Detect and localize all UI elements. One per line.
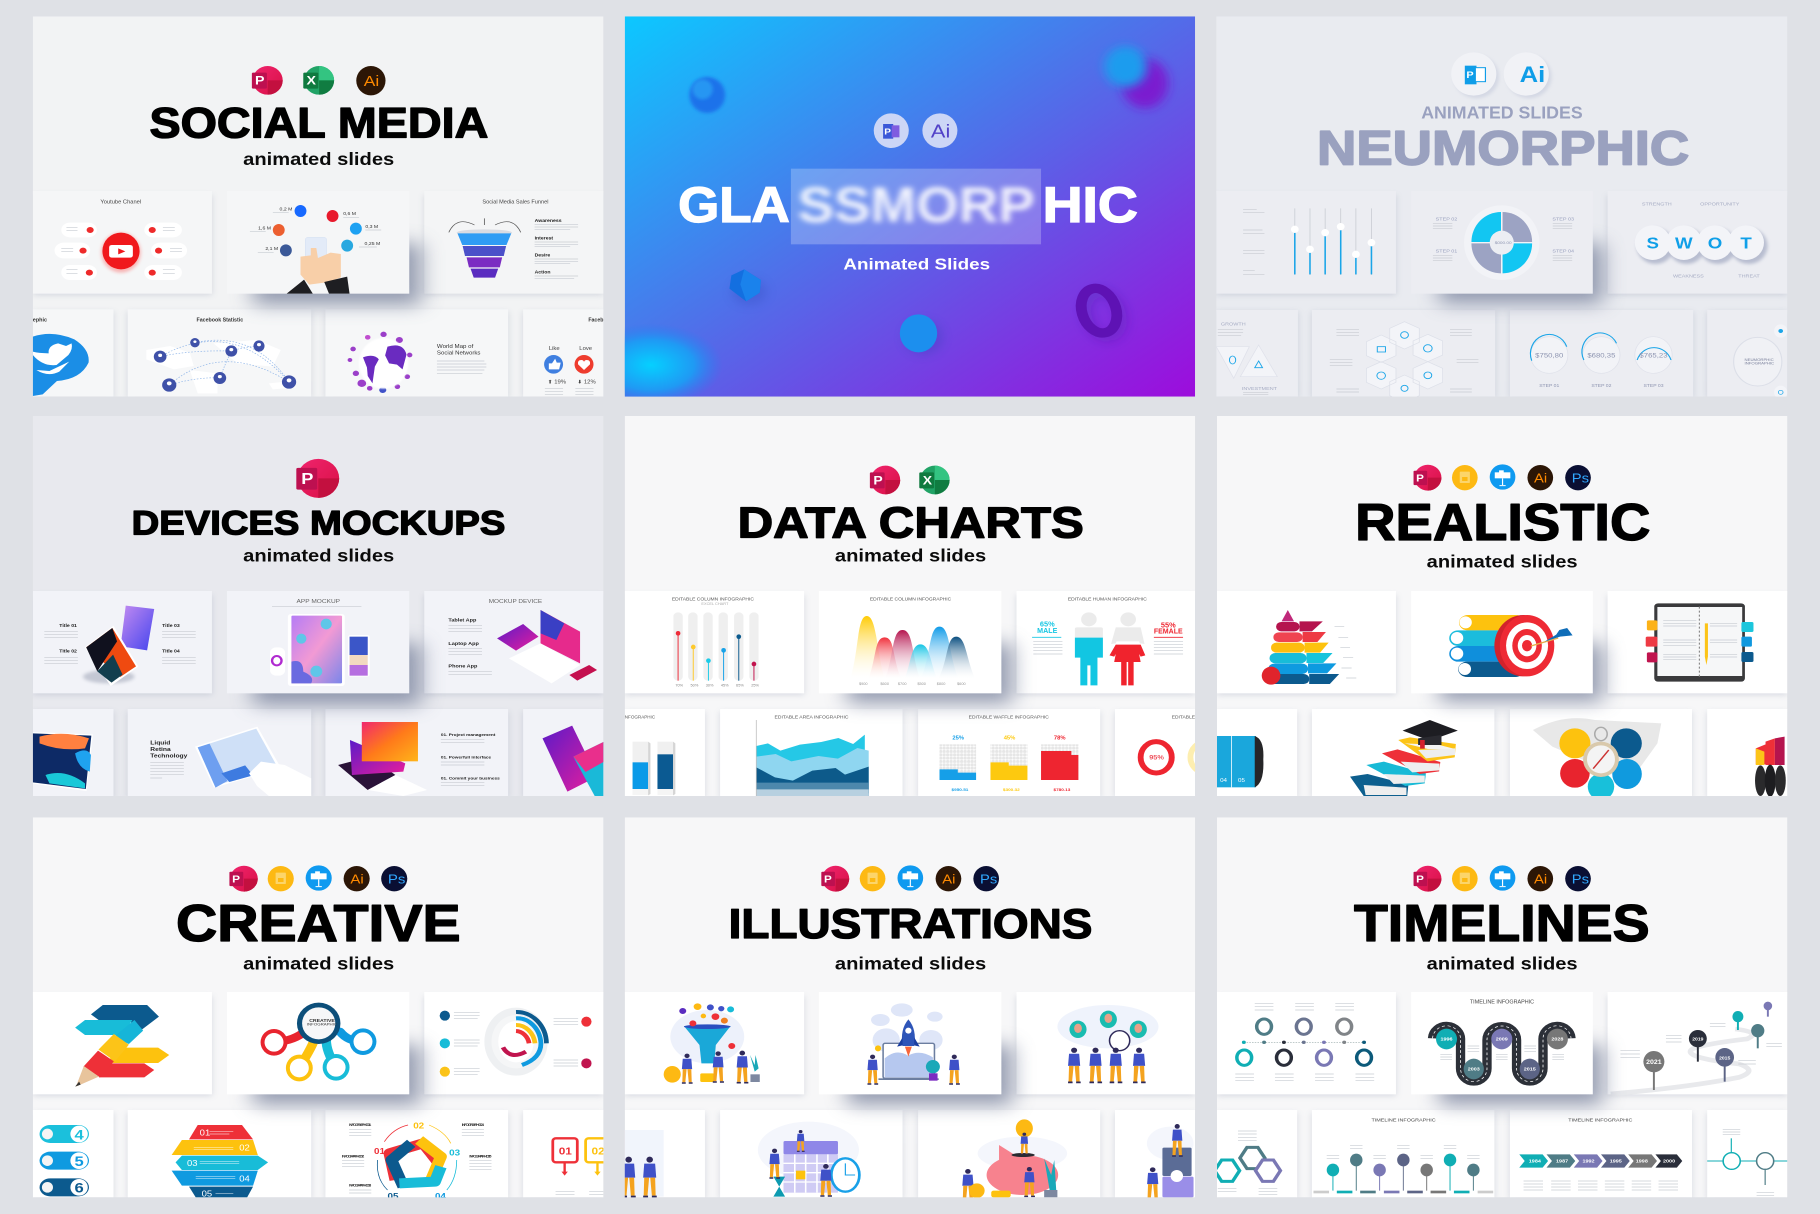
card: waffle chart: 25%	[952, 736, 964, 742]
card: facebook reactions: ⬆ 19%	[548, 380, 566, 385]
title: glassmorphic: GLA	[678, 177, 790, 233]
card: chevron timeline: 1995	[1610, 1159, 1622, 1165]
card: column timeline	[1312, 1110, 1494, 1197]
card: chevron timeline	[1510, 1110, 1692, 1197]
title: DATA CHARTS	[738, 499, 1084, 548]
card: knot cycle: 04	[435, 1192, 447, 1201]
icons: software row	[821, 865, 999, 892]
card: facebook reactions: Faceb	[588, 318, 604, 323]
card: youtube channel: Youtube Chanel	[100, 200, 141, 205]
card: posters stack: 01. Powerfull interface	[441, 755, 492, 760]
card: social media sales funnel	[424, 191, 603, 294]
icons: software row	[252, 66, 386, 95]
card: liquid retina technology: Liquid	[150, 740, 171, 746]
card: 3d map pins: 2019	[1692, 1037, 1704, 1042]
panel: devices mockups	[33, 416, 603, 798]
card: mountain chart: $700	[898, 682, 907, 686]
card: human infographic: EDITABLE HUMAN INFOGRAPHIC	[1068, 597, 1147, 602]
card: waffle chart: 45%	[1004, 736, 1016, 742]
card: segmented circle: STEP 01	[1436, 249, 1457, 254]
card: knot cycle: 02	[413, 1121, 424, 1130]
icons: powerpoint and illustrator	[874, 113, 957, 148]
card: social phone: 0,25 M	[365, 241, 380, 247]
icons: powerpoint and excel	[870, 466, 950, 494]
icons: software row: X	[306, 74, 316, 87]
card: knot cycle: 03	[449, 1148, 460, 1157]
card: hexagon stack: 05	[202, 1189, 212, 1198]
card: segmented circle: $000.00	[1495, 240, 1512, 245]
card: human infographic: 65%	[1040, 620, 1055, 629]
card: column lollipop chart: 30%	[706, 684, 714, 688]
ring	[1076, 285, 1127, 341]
card: pin labels: 01	[559, 1146, 572, 1157]
card: swot spheres: W	[1675, 234, 1693, 252]
subtitle: animated slides	[243, 150, 394, 170]
card: posters stack	[325, 709, 508, 796]
card: mountain chart: $600	[880, 682, 889, 686]
card: area chart	[720, 709, 903, 800]
card: chevron timeline: 1987	[1556, 1159, 1568, 1165]
icons: software row	[1414, 865, 1591, 892]
card: cylinder	[1217, 709, 1297, 796]
card: neumorphic ring	[1707, 310, 1787, 399]
card: road timeline: 2003	[1468, 1067, 1480, 1073]
card: facebook statistic: Facebook Statistic	[197, 318, 243, 323]
card: pin labels	[523, 1110, 610, 1197]
card: knot cycle: INFOGRAPHIC 02	[342, 1154, 365, 1158]
icons: software row: Ai	[1534, 873, 1547, 886]
card: social media sales funnel: Interest	[535, 236, 554, 241]
center card shadow	[847, 1045, 1013, 1105]
card: waffle chart: EDITABLE WAFFLE INFOGRAPHIC	[969, 715, 1049, 720]
card: waffle chart: $780.13	[1053, 787, 1071, 792]
card: world map of social networks	[325, 309, 508, 397]
icons: powerpoint and illustrator	[1460, 60, 1552, 98]
card: social phone: 0,3 M	[365, 224, 378, 230]
card: swot spheres	[1608, 191, 1787, 294]
card: chevron timeline: TIMELINE INFOGRAPHIC	[1568, 1118, 1633, 1123]
card: circle timeline	[1707, 1110, 1787, 1197]
subtitle: animated slides	[835, 547, 986, 566]
card: road timeline: TIMELINE INFOGRAPHIC	[1470, 1000, 1534, 1006]
card: hexagon stack: 01	[200, 1128, 210, 1137]
title: SOCIAL MEDIA	[149, 99, 488, 147]
icons: software row: Ai	[350, 872, 364, 886]
card: mountain chart: EDITABLE COLUMN INFOGRAPHIC	[870, 597, 952, 602]
card: column lollipop chart: EDITABLE COLUMN INFOGRAPHIC	[672, 597, 755, 602]
card: column lollipop chart: 25%	[751, 684, 760, 688]
card: notebook	[1608, 591, 1787, 693]
card: creative infographic: CREATIVE	[309, 1018, 335, 1024]
card: facebook reactions: Like	[549, 346, 560, 352]
card: chevron timeline: 1998	[1636, 1159, 1648, 1165]
icons: software row	[1414, 464, 1591, 491]
title: DEVICES MOCKUPS	[132, 504, 505, 543]
card: knot cycle: INFOGRAPHIC 01	[349, 1122, 372, 1127]
center card shadow	[1440, 1045, 1603, 1105]
card: app mockup: APP MOCKUP	[297, 598, 340, 605]
panel: glassmorphic	[579, 16, 1195, 407]
icon: powerpoint	[296, 459, 339, 498]
card: swot spheres: STRENGTH	[1642, 202, 1672, 208]
card: social phone: 1,6 M	[258, 226, 271, 231]
card: social media sales funnel: Action	[535, 270, 551, 275]
card: creative infographic	[227, 992, 409, 1094]
card: creative infographic: INFOGRAPHIC	[307, 1022, 337, 1027]
icons: software row: Ps	[980, 873, 997, 886]
card: funnel illustration	[625, 992, 804, 1094]
card: knot cycle: INFOGRAPHIC 04	[462, 1122, 485, 1127]
card: social media sales funnel: Desire	[535, 253, 551, 258]
card: segmented circle: STEP 04	[1552, 249, 1574, 254]
card: hexagon stack: 04	[239, 1174, 250, 1183]
card: world map of social networks: World Map of	[437, 343, 474, 350]
card: mountain chart: $900	[859, 682, 868, 686]
card: posters stack: 01. Project management	[441, 732, 496, 737]
card: youtube channel	[33, 191, 212, 294]
card: tires	[1707, 709, 1787, 797]
card: numbered pills	[33, 1110, 113, 1197]
card: price gauges	[1510, 310, 1693, 397]
card: puzzle illustration	[1115, 1110, 1195, 1200]
card: road timeline	[1411, 992, 1593, 1094]
card: swot spheres: THREAT	[1738, 274, 1760, 279]
card: neumorphic ring: INFOGRAPHIC	[1745, 361, 1774, 365]
card: phones	[523, 709, 603, 796]
card: 3d map pins: 2021	[1646, 1059, 1662, 1066]
card: price gauges: $680,35	[1587, 351, 1615, 359]
card: target	[1411, 591, 1593, 693]
card: mockup device: MOCKUP DEVICE	[489, 598, 542, 605]
card: column lollipop chart: 50%	[691, 684, 699, 688]
card: twitter cloud: ephic	[33, 318, 47, 323]
card: waffle chart: $300.32	[1003, 787, 1020, 792]
center card shadow	[1440, 643, 1603, 702]
subtitle: Animated Slides	[843, 256, 990, 273]
card: chevron timeline: 1992	[1582, 1159, 1595, 1165]
card: hexagon timeline	[1215, 1110, 1297, 1197]
card: segmented circle: STEP 03	[1552, 217, 1574, 222]
panel: social media	[33, 16, 604, 398]
icons: powerpoint and illustrator: Ai	[931, 122, 950, 142]
card: social phone	[236, 205, 410, 294]
card: mountain chart	[819, 591, 1001, 693]
card: ring chart	[424, 992, 603, 1094]
icons: powerpoint and illustrator: P	[1466, 71, 1474, 81]
center card shadow	[253, 1045, 421, 1105]
center card shadow	[253, 243, 421, 305]
card: facebook statistic	[128, 309, 311, 397]
card: chevron timeline: 2000	[1663, 1159, 1675, 1165]
icons: software row: Ps	[1572, 472, 1589, 485]
subtitle: animated slides	[243, 546, 394, 566]
card: column lollipop chart: 45%	[721, 684, 729, 688]
card: mockup device	[424, 591, 603, 693]
card: donut chart: 95%	[1149, 755, 1164, 762]
card: calendar illustration	[720, 1110, 903, 1197]
card: 3d map pins	[1608, 992, 1787, 1094]
card: numbered pills: 5	[74, 1154, 84, 1170]
card: liquid retina technology	[128, 709, 311, 796]
card: road timeline: 1996	[1440, 1037, 1453, 1043]
card: knot cycle: INFOGRAPHIC 05	[469, 1154, 492, 1158]
card: numbered pills: 4	[74, 1127, 84, 1143]
card: road timeline: 2015	[1524, 1067, 1536, 1073]
card: column lollipop chart: 65%	[736, 684, 745, 688]
card: dotted timeline pins	[1217, 992, 1396, 1094]
card: mockup device: Tablet App	[448, 618, 476, 623]
card: price gauges: $750,80	[1535, 351, 1563, 359]
card: waffle chart: $950.51	[952, 787, 969, 792]
card: chevron timeline: 1984	[1529, 1159, 1541, 1165]
card: pin labels: 02	[592, 1146, 605, 1157]
card: liquid retina technology: Technology	[150, 753, 188, 759]
card: recruitment illustration	[1017, 992, 1195, 1094]
card: swot spheres: O	[1708, 234, 1722, 252]
card: mountain chart: $500	[917, 682, 926, 686]
card: swot spheres: T	[1740, 234, 1752, 252]
icon: powerpoint: P	[301, 470, 313, 488]
card: price gauges: STEP 02	[1591, 383, 1612, 388]
title: TIMELINES	[1354, 894, 1650, 952]
card: neumorphic triangles	[1216, 310, 1298, 397]
icons: software row: P	[1416, 473, 1424, 484]
icons: powerpoint and illustrator: Ai	[1520, 63, 1545, 88]
icons: software row: P	[232, 874, 240, 885]
title: CREATIVE	[176, 895, 461, 953]
icons: software row: Ps	[388, 872, 405, 886]
gem shape	[729, 269, 767, 305]
card: social phone: 2,1 M	[265, 246, 278, 252]
card: poster mockup	[33, 709, 113, 796]
card: knot cycle: 05	[388, 1192, 398, 1201]
card: 3d bars: NFOGRAPHIC	[625, 715, 656, 720]
card: mountain chart: $600	[957, 682, 966, 686]
card: column timeline: TIMELINE INFOGRAPHIC	[1371, 1118, 1436, 1123]
panel: illustrations	[622, 817, 1195, 1202]
card: floating tablets: Title 02	[59, 649, 77, 654]
card: floating tablets	[33, 591, 212, 693]
panel: neumorphic	[1216, 16, 1787, 402]
panel: data charts	[625, 416, 1222, 800]
icons: powerpoint and excel: P	[873, 474, 883, 487]
card: area chart: EDITABLE AREA INFOGRAPHIC	[775, 715, 849, 720]
card: social media sales funnel: Social Media Sales Funnel	[482, 200, 548, 205]
card: cylinder: 04	[1220, 778, 1228, 784]
card: segmented circle: STEP 02	[1436, 217, 1457, 222]
card: mockup device: Phone App	[448, 664, 477, 669]
card: neumorphic triangles: GROWTH	[1221, 322, 1246, 328]
card: numbered pills: 6	[74, 1181, 84, 1196]
icons: software row: Ai	[364, 73, 379, 90]
card: knot cycle	[325, 1110, 508, 1201]
icons: software row: P	[255, 74, 265, 87]
title: REALISTIC	[1355, 493, 1650, 551]
subtitle: animated slides	[1427, 553, 1578, 572]
card: hexagon cycle	[1312, 310, 1495, 402]
title: glassmorphic: HIC	[1043, 177, 1138, 233]
card: column lollipop chart	[625, 591, 804, 693]
center card shadow	[1440, 243, 1603, 303]
card: 3d map pins: 2015	[1719, 1056, 1731, 1060]
card: app mockup	[227, 591, 409, 693]
subtitle: animated slides	[243, 954, 394, 974]
title: ILLUSTRATIONS	[729, 900, 1092, 947]
title: glassmorphic	[678, 169, 1138, 244]
ball	[900, 314, 943, 355]
card: neumorphic ring: NEUMORPHIC	[1745, 357, 1774, 362]
card: facebook reactions	[523, 309, 604, 397]
icons: software row	[229, 865, 407, 892]
card: stacked rings	[1217, 591, 1396, 693]
card: knot cycle: INFOGRAPHIC 03	[349, 1183, 372, 1188]
card: business people	[622, 1110, 705, 1198]
card: swot spheres: OPPORTUNITY	[1700, 202, 1740, 208]
card: 3d bars	[625, 709, 705, 796]
title: glassmorphic: SSMORP	[798, 177, 1035, 233]
card: floating tablets: Title 01	[59, 623, 77, 629]
card: neumorphic triangles: INVESTMENT	[1242, 386, 1277, 392]
card: waffle chart	[918, 709, 1100, 796]
card: human infographic	[1017, 591, 1195, 693]
card: road timeline: 2009	[1496, 1037, 1508, 1043]
center card shadow	[253, 643, 421, 705]
card: human infographic: 55%	[1161, 621, 1176, 629]
card: waffle chart: 78%	[1054, 736, 1066, 742]
card: hexagon stack: 03	[187, 1159, 198, 1168]
card: swot spheres: WEAKNESS	[1673, 274, 1704, 279]
icons: software row: Ai	[1534, 472, 1547, 485]
card: human infographic: FEMALE	[1154, 627, 1183, 636]
card: column lollipop chart: EXCEL CHART	[701, 602, 729, 606]
card: price gauges: STEP 01	[1539, 383, 1560, 388]
subtitle: animated slides	[835, 955, 986, 974]
card: floating tablets: Title 04	[162, 649, 180, 654]
icons: powerpoint and illustrator: P	[884, 126, 891, 136]
icons: software row: P	[1416, 874, 1424, 885]
title: NEUMORPHIC	[1317, 121, 1689, 175]
card: hexagon stack	[128, 1110, 311, 1198]
card: facebook reactions: ⬇ 12%	[577, 380, 596, 385]
card: segmented circle	[1423, 206, 1593, 294]
panel: realistic	[1217, 416, 1787, 800]
card: floating tablets: Title 03	[162, 623, 180, 629]
panel: timelines	[1215, 817, 1787, 1199]
icons: software row: P	[824, 874, 832, 885]
card: mockup device: Laptop App	[448, 641, 479, 647]
card: price gauges: STEP 03	[1643, 383, 1664, 388]
card: mountain chart: $800	[937, 682, 945, 686]
card: world map of social networks: Social Networks	[437, 350, 480, 356]
card: liquid retina technology: Retina	[150, 746, 171, 753]
blurred spheres	[579, 46, 1168, 407]
card: social media sales funnel: Awareness	[535, 218, 562, 224]
card: donut chart	[1115, 709, 1222, 796]
card: posters stack: 01. Commit your business	[441, 776, 500, 781]
subtitle: ANIMATED SLIDES	[1421, 103, 1583, 122]
card: knot cycle: 01	[374, 1147, 385, 1156]
card: rocket illustration	[819, 992, 1001, 1094]
card: price gauges: $765,23	[1639, 351, 1668, 359]
card: cylinder: 05	[1238, 778, 1245, 784]
card: twitter cloud	[33, 309, 113, 397]
card: slider chart	[1216, 191, 1396, 294]
card: road timeline: 2028	[1551, 1037, 1564, 1043]
icons: software row: Ps	[1572, 873, 1589, 886]
card: social phone: 0,2 M	[280, 207, 292, 212]
center card shadow	[847, 643, 1013, 703]
card: hexagon stack: 02	[239, 1143, 250, 1152]
card: swot spheres: S	[1646, 234, 1659, 252]
card: facebook reactions: Love	[579, 346, 592, 352]
card: donut chart: EDITABLE	[1172, 715, 1195, 720]
subtitle: animated slides	[1427, 955, 1578, 974]
icons: powerpoint and excel: X	[923, 474, 932, 487]
card: pencil arrows	[33, 992, 212, 1094]
card: piggy bank illustration	[918, 1110, 1100, 1202]
card: social phone: 0,6 M	[343, 211, 356, 217]
card: compass petals	[1510, 709, 1692, 800]
icons: software row: Ai	[942, 873, 955, 886]
card: column lollipop chart: 70%	[675, 684, 684, 688]
card: human infographic: MALE	[1037, 627, 1057, 635]
card: books and cap	[1312, 709, 1494, 796]
panel: creative	[33, 817, 610, 1201]
